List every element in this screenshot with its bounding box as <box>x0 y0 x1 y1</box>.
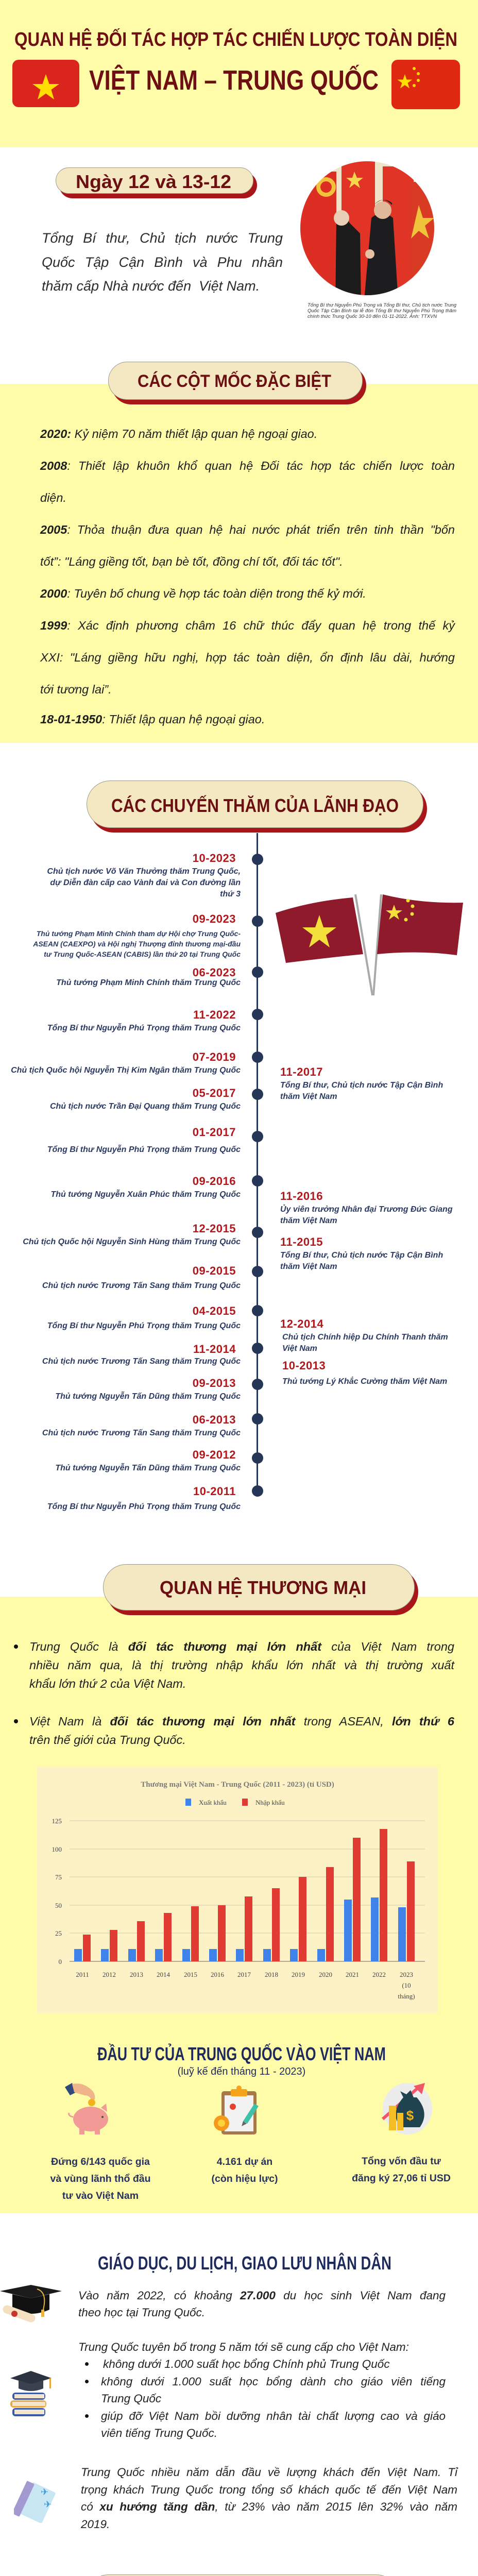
investment heading: ĐẦU TƯ CỦA TRUNG QUỐC VÀO VIỆT NAM <box>97 2043 386 2064</box>
visit 01-2017 <box>47 1126 241 1154</box>
visit 11-2017 (China): Tổng Bí thư, Chủ tịch nước Tập Cận Bình <box>280 1081 443 1090</box>
trade bullets: nhiều năm qua, là thị trường nhập khẩu lớn nhất và thị trường xuất <box>29 1658 454 1672</box>
investment stat: rank <box>50 2156 151 2201</box>
badge: trade <box>103 1564 415 1611</box>
milestones text: tốt”: "Láng giềng tốt, bạn bè tốt, đồng chí tốt, đối tác tốt". <box>40 555 343 568</box>
trade bullets: Việt Nam là đối tác thương mại lớn nhất trong ASEAN, lớn thứ 6 <box>29 1715 454 1728</box>
bar chart: 50 <box>55 1902 62 1909</box>
milestones text: 2008: Thiết lập khuôn khổ quan hệ Đối tác hợp tác chiến lược toàn <box>40 459 455 472</box>
visit 10-2023 <box>47 852 241 899</box>
title: VIỆT NAM – TRUNG QUỐC <box>89 64 379 96</box>
bar chart: 2011 <box>76 1971 89 1978</box>
bar chart: 2012 <box>103 1971 116 1978</box>
visit 04-2015: 04-2015 <box>193 1304 236 1317</box>
icon: plane tickets <box>14 2476 61 2523</box>
visit 11-2015 (China): thăm Việt Nam <box>280 1262 337 1271</box>
bar chart: 2015 <box>184 1971 197 1978</box>
bar chart: 2023 <box>400 1971 413 1978</box>
investment stat: projects: (còn hiệu lực) <box>212 2173 278 2184</box>
investment stat: capital <box>352 2156 451 2184</box>
bar chart: 2022 <box>372 1971 386 1978</box>
education text: giúp đỡ Việt Nam bồi dưỡng nhân tài chất lượng cao và giáo <box>101 2410 446 2422</box>
trade bullets: trên thế giới của Trung Quốc. <box>29 1733 186 1747</box>
visit 10-2013 (China) <box>282 1359 447 1386</box>
visit 11-2022: 11-2022 <box>193 1008 236 1021</box>
milestones text: 18-01-1950: Thiết lập quan hệ ngoại giao. <box>40 713 265 726</box>
photo caption: Tổng Bí thư Nguyễn Phú Trọng và Tổng Bí thư, Chủ tịch nước Trung Quốc Tập Cận Bình tại lễ đón Tổng Bí thư Nguyễn Phú Trọng thăm chính thức Trung Quốc 30-10 đến 01-11-2022. Ảnh: TTXVN <box>308 302 456 319</box>
investment stat: rank: Đứng 6/143 quốc gia <box>51 2156 150 2167</box>
icon: money bag: $ <box>406 2108 414 2123</box>
education text: không dưới 1.000 suất học bổng dành cho giáo viên tiếng <box>101 2375 446 2388</box>
visit 09-2023 <box>33 912 241 958</box>
visit 09-2023: 09-2023 <box>193 912 236 925</box>
timeline <box>252 833 263 1497</box>
tourism text: 2019. <box>81 2517 110 2531</box>
bar chart: tháng) <box>398 1992 415 2000</box>
intro text: Quốc Tập Cận Bình và Phu nhân <box>42 255 283 270</box>
visit 12-2014 (China): Việt Nam <box>282 1344 317 1353</box>
visit 12-2015: Chủ tịch Quốc hội Nguyễn Sinh Hùng thăm Trung Quốc <box>23 1238 241 1246</box>
icon: plane tickets: ✈ <box>41 2487 48 2498</box>
visit 09-2023: Thủ tướng Phạm Minh Chính tham dự Hội chợ Trung Quốc- <box>37 929 241 938</box>
badge: date: Ngày 12 và 13-12 <box>76 171 231 192</box>
milestones text: 2020: Kỷ niệm 70 năm thiết lập quan hệ ngoại giao. <box>40 427 317 440</box>
visit 12-2014 (China): 12-2014 <box>280 1317 323 1330</box>
visit 11-2016 (China): thăm Việt Nam <box>280 1216 337 1225</box>
visit 11-2015 (China): Tổng Bí thư, Chủ tịch nước Tập Cận Bình <box>280 1251 443 1260</box>
visit 09-2023: ASEAN (CAEXPO) và Hội nghị Thượng đỉnh thương mại-đầu <box>33 940 241 948</box>
visit 11-2017 (China): thăm Việt Nam <box>280 1092 337 1101</box>
investment heading: (luỹ kế đến tháng 11 - 2023) <box>178 2066 305 2077</box>
visit 10-2011: 10-2011 <box>193 1485 236 1498</box>
photo <box>300 161 434 295</box>
visit 11-2017 (China): 11-2017 <box>280 1065 323 1078</box>
visit 09-2012: 09-2012 <box>193 1448 236 1461</box>
investment stat: projects: 4.161 dự án <box>217 2156 272 2167</box>
tourism text: Trung Quốc nhiều năm dẫn đầu về lượng khách đến Việt Nam. Tỉ <box>81 2466 457 2479</box>
bar chart <box>37 1767 437 2013</box>
visit 11-2015 (China) <box>280 1235 443 1271</box>
bar chart: 2014 <box>157 1971 170 1978</box>
bar chart: Nhập khẩu <box>255 1799 285 1806</box>
bar chart: 75 <box>55 1873 62 1881</box>
visit 10-2011 <box>47 1485 241 1511</box>
bar chart: 2019 <box>292 1971 305 1978</box>
visit 12-2014 (China): Chủ tịch Chính hiệp Du Chính Thanh thăm <box>282 1333 448 1342</box>
education text: Trung Quốc tuyên bố trong 5 năm tới sẽ cung cấp cho Việt Nam: <box>78 2341 409 2353</box>
badge: trade: QUAN HỆ THƯƠNG MẠI <box>160 1577 366 1598</box>
visit 06-2023: 06-2023 <box>193 966 236 979</box>
visit 07-2019 <box>11 1050 241 1075</box>
icon: waving flags <box>276 894 463 995</box>
tourism text: trọng khách Trung Quốc trong tổng số khách quốc tế đến Việt Nam <box>81 2483 457 2496</box>
visit 06-2023 <box>56 966 241 987</box>
bar chart: 2016 <box>211 1971 225 1978</box>
milestones text: 2000: Tuyên bố chung về hợp tác toàn diện trong thế kỷ mới. <box>40 587 366 600</box>
bar chart: 25 <box>55 1929 62 1937</box>
visit 11-2022 <box>47 1008 241 1032</box>
visit 11-2017 (China) <box>280 1065 443 1101</box>
visit 11-2014: 11-2014 <box>193 1343 236 1355</box>
education text: viên tiếng Trung Quốc. <box>101 2427 217 2439</box>
bar chart: Xuất khẩu <box>199 1799 227 1806</box>
bar chart: 2020 <box>319 1971 332 1978</box>
investment stat: projects <box>212 2156 278 2184</box>
intro text: thăm cấp Nhà nước đến Việt Nam. <box>42 278 260 294</box>
visit 11-2022: Tổng Bí thư Nguyễn Phú Trọng thăm Trung Quốc <box>47 1024 241 1032</box>
education text: Trung Quốc <box>101 2392 161 2405</box>
visit 05-2017: 05-2017 <box>193 1087 236 1099</box>
visit 09-2016: Thủ tướng Nguyễn Xuân Phúc thăm Trung Quốc <box>50 1190 241 1199</box>
bar chart: 2018 <box>265 1971 278 1978</box>
tourism text: có xu hướng tăng dần, từ 23% vào năm 2015 lên 32% vào năm <box>81 2500 457 2513</box>
bar chart: 2013 <box>130 1971 143 1978</box>
title <box>14 27 457 96</box>
visit 12-2015 <box>23 1222 241 1246</box>
investment stat: capital: đăng ký 27,06 tỉ USD <box>352 2173 451 2184</box>
trade bullets <box>14 1640 455 1747</box>
visit 12-2014 (China) <box>280 1317 448 1353</box>
visit 09-2013 <box>55 1377 241 1401</box>
milestones text: 1999: Xác định phương châm 16 chữ thúc đẩy quan hệ trong thế kỷ <box>40 619 455 632</box>
tourism text <box>81 2464 457 2533</box>
icon: clipboard <box>214 2086 259 2134</box>
bar chart: 100 <box>52 1845 62 1853</box>
icon: money bag <box>382 2083 432 2134</box>
education text: theo học tại Trung Quốc. <box>78 2306 205 2319</box>
visit 09-2015: 09-2015 <box>193 1264 236 1277</box>
milestones text: diện. <box>40 491 66 504</box>
visit 10-2023: Chủ tịch nước Võ Văn Thưởng thăm Trung Quốc, <box>47 867 241 876</box>
badge: border <box>86 2574 399 2576</box>
visit 11-2016 (China): 11-2016 <box>280 1190 323 1202</box>
bar chart: 2017 <box>237 1971 251 1978</box>
education heading: GIÁO DỤC, DU LỊCH, GIAO LƯU NHÂN DÂN <box>98 2252 391 2274</box>
visit 11-2015 (China): 11-2015 <box>280 1235 323 1248</box>
visit 06-2013: 06-2013 <box>193 1413 236 1426</box>
visit 09-2013: Thủ tướng Nguyễn Tấn Dũng thăm Trung Quốc <box>55 1392 241 1401</box>
visit 07-2019: Chủ tịch Quốc hội Nguyễn Thị Kim Ngân thăm Trung Quốc <box>11 1066 241 1075</box>
milestones text <box>40 427 455 726</box>
visit 06-2013 <box>42 1413 241 1437</box>
visit 09-2013: 09-2013 <box>193 1377 236 1389</box>
trade bullets: Trung Quốc là đối tác thương mại lớn nhất của Việt Nam trong <box>29 1640 454 1653</box>
milestones text: tới tương lai”. <box>40 683 112 696</box>
visit 11-2014: Chủ tịch nước Trương Tấn Sang thăm Trung Quốc <box>42 1357 241 1366</box>
visit 05-2017 <box>50 1087 241 1111</box>
education text: không dưới 1.000 suất học bổng Chính phủ Trung Quốc <box>103 2358 390 2370</box>
milestones text: XXI: "Láng giềng hữu nghị, hợp tác toàn diện, ổn định lâu dài, hướng <box>40 651 455 664</box>
visit 06-2023: Thủ tướng Phạm Minh Chính thăm Trung Quốc <box>56 978 241 987</box>
visit 11-2016 (China): Ủy viên trưởng Nhân đại Trương Đức Giang <box>280 1205 453 1214</box>
investment stat: capital: Tổng vốn đầu tư <box>362 2156 441 2167</box>
icon: vietnam flag <box>12 60 79 107</box>
badge: milestones: CÁC CỘT MỐC ĐẶC BIỆT <box>138 371 331 391</box>
bar chart: 0 <box>59 1958 62 1965</box>
bar chart: (10 <box>402 1981 411 1989</box>
icon: graduation cap <box>0 2285 62 2323</box>
education text <box>78 2289 446 2439</box>
milestones text: 2005: Thỏa thuận đưa quan hệ hai nước phát triển trên tinh thần "bốn <box>40 523 455 536</box>
icon: piggy bank <box>65 2083 108 2134</box>
visit 09-2012 <box>55 1448 241 1472</box>
visit 10-2023: thứ 3 <box>220 890 241 899</box>
education text: Vào năm 2022, có khoảng 27.000 du học sinh Việt Nam đang <box>78 2289 446 2302</box>
visit 10-2013 (China): 10-2013 <box>282 1359 326 1372</box>
visit 10-2023: dự Diễn đàn cấp cao Vành đai và Con đường lần <box>50 878 241 887</box>
visit 11-2014 <box>42 1343 241 1366</box>
visit 09-2023: tư Trung Quốc-ASEAN (CABIS) lần thứ 20 tại Trung Quốc <box>44 950 241 958</box>
investment heading <box>97 2043 386 2077</box>
bar chart: 2021 <box>346 1971 359 1978</box>
bar chart: 125 <box>52 1817 62 1825</box>
visit 09-2015 <box>42 1264 241 1290</box>
visit 09-2016 <box>50 1175 241 1199</box>
visit 10-2023: 10-2023 <box>193 852 236 865</box>
intro text: Tổng Bí thư, Chủ tịch nước Trung <box>42 230 283 246</box>
visit 05-2017: Chủ tịch nước Trần Đại Quang thăm Trung Quốc <box>50 1102 241 1111</box>
visit 10-2013 (China): Thủ tướng Lý Khắc Cường thăm Việt Nam <box>282 1377 447 1386</box>
trade bullets: khẩu lớn thứ 2 của Việt Nam. <box>29 1677 186 1690</box>
visit 04-2015 <box>47 1304 241 1330</box>
icon: plane tickets: ✈ <box>44 2499 52 2510</box>
visit 10-2011: Tổng Bí thư Nguyễn Phú Trọng thăm Trung Quốc <box>47 1502 241 1511</box>
visit 11-2016 (China) <box>280 1190 453 1225</box>
visit 01-2017: Tổng Bí thư Nguyễn Phú Trọng thăm Trung Quốc <box>47 1145 241 1154</box>
investment stat: rank: và vùng lãnh thổ đầu <box>50 2173 151 2184</box>
visit 01-2017: 01-2017 <box>193 1126 236 1139</box>
visit 09-2012: Thủ tướng Nguyễn Tấn Dũng thăm Trung Quốc <box>55 1464 241 1472</box>
icon: books <box>10 2371 53 2417</box>
visit 07-2019: 07-2019 <box>193 1050 236 1063</box>
icon: china flag <box>391 60 460 109</box>
visit 06-2013: Chủ tịch nước Trương Tấn Sang thăm Trung Quốc <box>42 1429 241 1437</box>
bar chart: Thương mại Việt Nam - Trung Quốc (2011 - 2023) (tỉ USD) <box>141 1781 334 1789</box>
badge: leader visits <box>87 781 423 828</box>
intro text <box>42 230 283 294</box>
visit 09-2016: 09-2016 <box>193 1175 236 1188</box>
visit 09-2015: Chủ tịch nước Trương Tấn Sang thăm Trung Quốc <box>42 1281 241 1290</box>
visit 12-2015: 12-2015 <box>193 1222 236 1235</box>
investment stat: rank: tư vào Việt Nam <box>62 2190 139 2201</box>
badge: milestones <box>108 362 363 400</box>
visit 04-2015: Tổng Bí thư Nguyễn Phú Trọng thăm Trung Quốc <box>47 1321 241 1330</box>
badge: date <box>56 167 253 194</box>
